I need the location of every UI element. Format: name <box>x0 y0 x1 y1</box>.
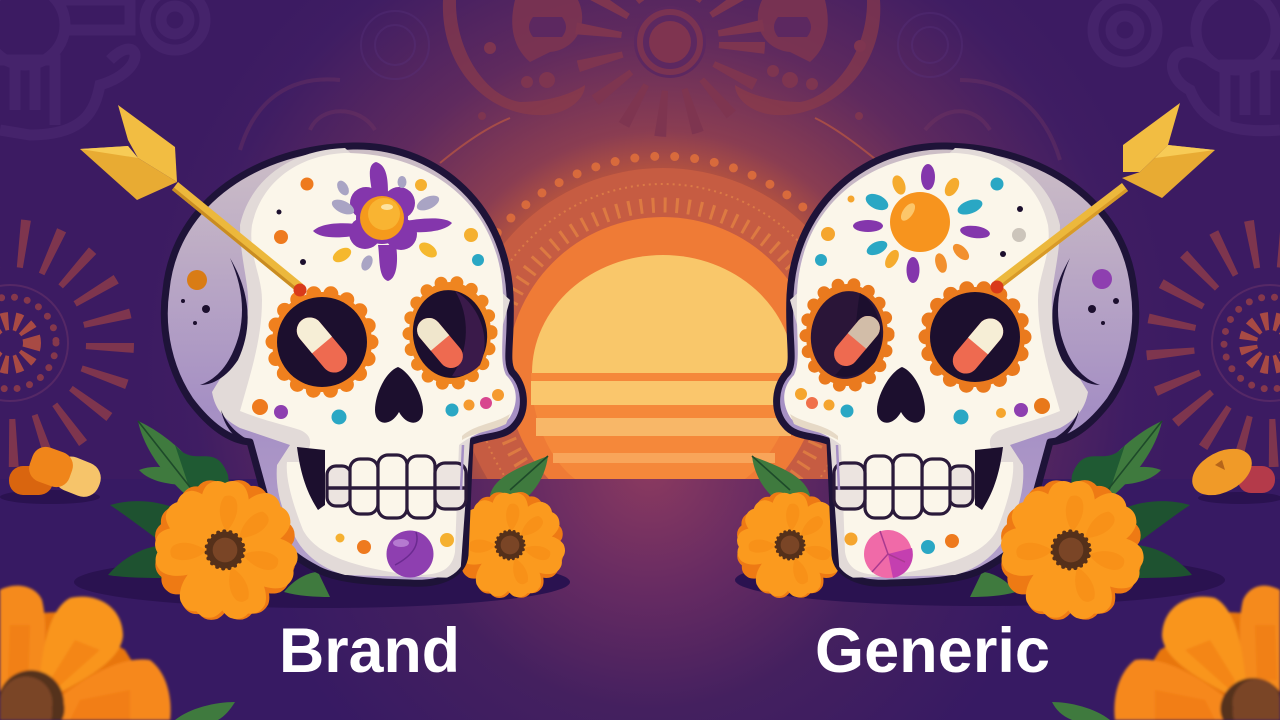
right skull ground shadow <box>735 554 1225 606</box>
decorative dots <box>795 178 1119 554</box>
setting sun with stripes <box>531 255 796 479</box>
right skull: Generic <box>777 103 1215 583</box>
right side pills <box>1184 439 1280 505</box>
background pattern: left mandala <box>0 243 110 443</box>
arrow right <box>990 103 1215 294</box>
bottom left corner leaf <box>175 702 235 720</box>
arrow left <box>80 105 306 296</box>
left small flower <box>453 488 568 602</box>
right eye with scalloped ring and pill <box>407 282 493 384</box>
decorative dots <box>181 178 504 554</box>
right large flower <box>996 475 1148 625</box>
label: Brand: Brand <box>279 616 460 686</box>
chin tablet purple <box>386 530 434 578</box>
background pattern: right mandala <box>1170 243 1280 443</box>
right small flower <box>733 488 848 602</box>
left side pills <box>0 443 106 504</box>
background pattern: top right swirl <box>898 0 1280 160</box>
chin tablet pink <box>864 530 913 578</box>
right leaves <box>752 421 1192 597</box>
floor <box>0 479 1280 720</box>
left eye with scalloped ring and pill <box>272 292 372 392</box>
right eye with scalloped ring and pill <box>925 287 1025 387</box>
label: Generic: Generic <box>815 616 1050 686</box>
forehead sun decoration <box>853 164 991 283</box>
left leaves <box>108 421 548 597</box>
bottom left blurred flower <box>0 586 171 720</box>
left large flower <box>150 475 302 625</box>
forehead flower <box>313 162 452 281</box>
left skull: Brand <box>80 105 523 583</box>
bottom right corner leaf <box>1052 702 1110 720</box>
background wall <box>0 0 1280 480</box>
left eye with scalloped ring and pill <box>805 284 889 386</box>
bottom right blurred flower <box>1114 586 1280 720</box>
left skull ground shadow <box>74 556 570 608</box>
background pattern: top centre mandala <box>440 0 880 163</box>
sun backdrop rings <box>458 156 868 578</box>
background pattern: top left swirl <box>0 0 429 150</box>
